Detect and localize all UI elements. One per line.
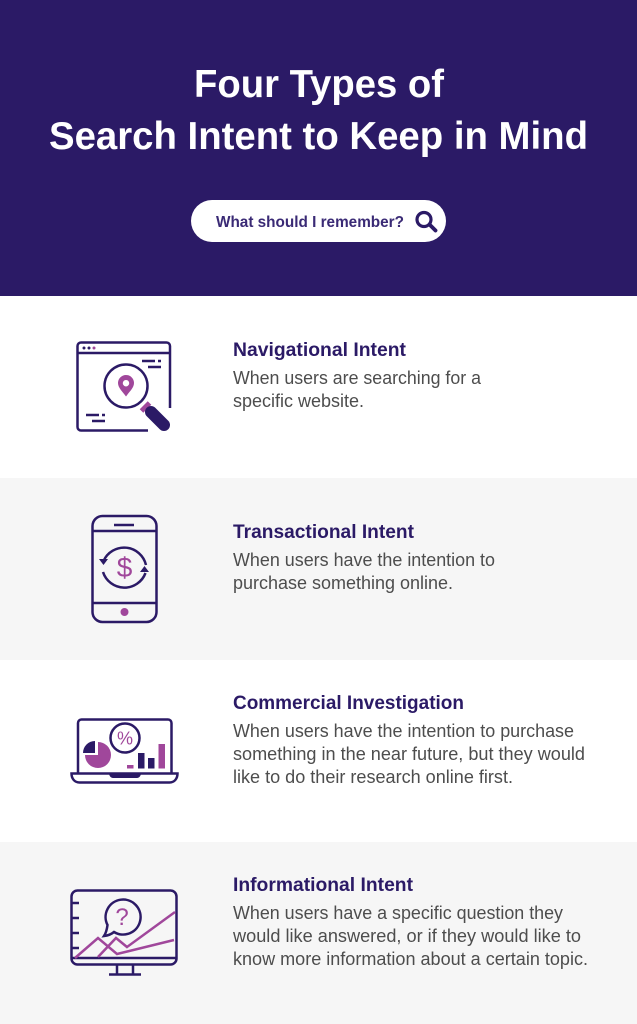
title: Four Types of: [194, 63, 445, 106]
description: [232, 902, 588, 969]
description: When users have the intention to purchase: [233, 720, 574, 741]
description: When users have the intention to: [233, 549, 495, 570]
description: When users have a specific question they: [233, 902, 564, 923]
icon: magnifying glass: [417, 212, 436, 230]
description: purchase something online.: [233, 572, 453, 593]
description: something in the near future, but they would: [233, 743, 585, 764]
icon: phone with dollar: $: [117, 552, 133, 583]
description: would like answered, or if they would like to: [232, 925, 581, 946]
panel: transactional intent: [0, 478, 637, 660]
icon: laptop with charts: %: [117, 728, 133, 748]
search bar: [191, 200, 446, 242]
search bar: What should I remember?: [216, 214, 404, 231]
heading: Commercial Investigation: [233, 692, 464, 714]
description: know more information about a certain topic.: [233, 948, 588, 969]
heading: Informational Intent: [233, 874, 413, 896]
icon: laptop with charts: [72, 720, 178, 782]
heading: Transactional Intent: [233, 521, 414, 543]
panel: commercial investigation: [0, 660, 637, 842]
description: specific website.: [233, 390, 364, 411]
icon: monitor with question bubble and graph: [72, 890, 177, 974]
panel: header: [0, 0, 637, 296]
panel: informational intent: [0, 842, 637, 1024]
description: [233, 720, 585, 787]
icon: monitor with question bubble and graph: ?: [115, 904, 129, 931]
description: When users are searching for a: [233, 367, 482, 388]
icon: phone with dollar: [92, 516, 156, 622]
panel: navigational intent: [0, 296, 637, 478]
title: [49, 63, 588, 158]
icon: browser with magnifier and map pin: [78, 342, 170, 430]
heading: Navigational Intent: [233, 339, 406, 361]
description: [233, 367, 482, 411]
title: Search Intent to Keep in Mind: [49, 115, 588, 158]
description: like to do their research online first.: [233, 766, 513, 787]
description: [233, 549, 495, 593]
